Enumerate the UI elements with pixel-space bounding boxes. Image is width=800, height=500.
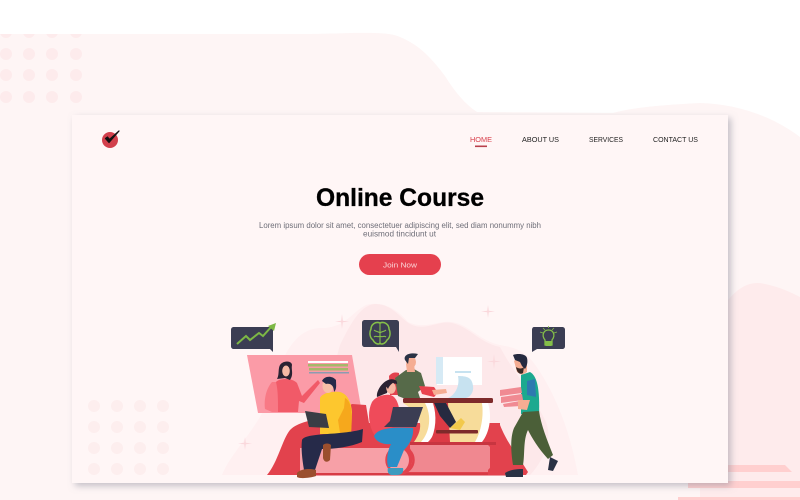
laptop screen	[436, 357, 482, 398]
landing page card	[72, 115, 728, 483]
student: woman with laptop	[369, 379, 423, 475]
background stripes	[678, 465, 800, 500]
join now button: Join Now	[383, 260, 418, 270]
student: man in green shirt	[395, 353, 465, 430]
student: man in yellow sweater reading	[297, 377, 363, 478]
speech bubble: growth chart	[231, 323, 276, 352]
sparkle decorations	[238, 305, 501, 450]
description text	[259, 221, 541, 238]
navigation menu: HOME	[470, 135, 492, 144]
icon: logo check mark	[102, 131, 119, 148]
speech bubble: brain	[362, 320, 399, 352]
description text: Lorem ipsum dolor sit amet, consectetuer adipiscing elit, sed diam nonummy nibh	[259, 221, 541, 230]
join now button	[359, 254, 441, 275]
title: Online Course	[316, 184, 484, 212]
card dot pattern	[88, 400, 169, 475]
speech bubble: light bulb	[532, 326, 565, 352]
navigation menu: ABOUT US	[522, 135, 559, 144]
video screen with instructor	[247, 355, 362, 413]
navigation menu: CONTACT US	[653, 135, 698, 144]
navigation menu	[470, 135, 698, 147]
large red book base left	[267, 404, 500, 475]
illustration backdrop	[222, 304, 578, 475]
red book behind man	[389, 372, 400, 395]
man carrying books	[500, 354, 558, 477]
instructor	[265, 362, 320, 412]
background dot pattern	[0, 34, 82, 103]
screen text lines	[308, 361, 349, 374]
open book table	[403, 398, 493, 442]
description text: euismod tincidunt ut	[363, 230, 437, 238]
book stack	[300, 424, 528, 476]
navigation menu: SERVICES	[589, 135, 623, 144]
illustration	[222, 304, 578, 478]
